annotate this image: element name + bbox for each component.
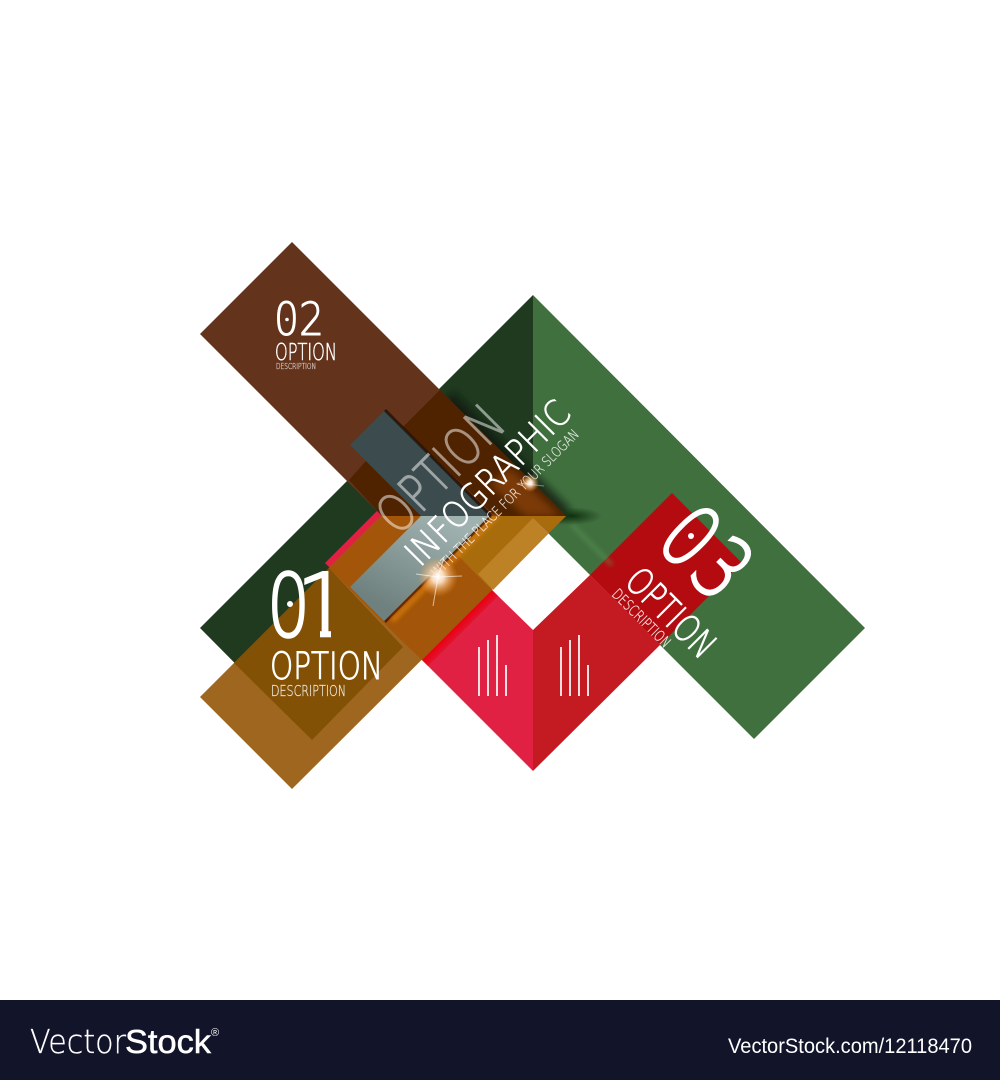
icon: small light flare: [518, 474, 544, 492]
panel: red chevron: [325, 493, 742, 771]
heading: infographic: INFOGRAPHIC: [397, 393, 579, 574]
icon: large light flare: [416, 557, 462, 606]
footer logo: Vector: [30, 1022, 126, 1061]
text block: option 02: 02: [274, 293, 324, 346]
text block: option 03: DESCRIPTION: [608, 585, 675, 652]
text block: option 01: OPTION: [270, 645, 383, 688]
text block: option 01: [272, 570, 379, 696]
text block: option 02: DESCRIPTION: [276, 362, 316, 371]
panel: green chevron: [200, 295, 865, 740]
text block: option 02: [274, 293, 337, 371]
slogan text: WITH THE PLACE FOR YOUR SLOGAN: [429, 427, 583, 581]
text block: option 03: [608, 486, 773, 667]
footer bar: [0, 1000, 1000, 1080]
text block: option 01: 0: [267, 555, 310, 657]
footer logo: ®: [211, 1027, 219, 1039]
footer image id: VectorStock.com/12118470: [728, 1035, 972, 1058]
panel: grey bar: [350, 410, 498, 622]
text block: option 03: 0: [639, 486, 741, 588]
panel: brown band: [200, 242, 566, 516]
icon: left red bar chart: [478, 635, 507, 696]
text block: option 03: OPTION: [617, 559, 725, 667]
shadow on green near the tip: [448, 398, 612, 565]
heading: center option: OPTION: [365, 393, 518, 546]
icon: right red bar chart: [560, 635, 589, 696]
text block: option 01: 1: [296, 555, 351, 657]
infographic canvas: [0, 242, 1000, 1080]
footer logo: [30, 1022, 219, 1061]
text block: option 01: DESCRIPTION: [271, 682, 346, 700]
panel: orange band: [200, 516, 566, 789]
text block: option 02: OPTION: [275, 340, 337, 366]
text block: option 03: 3: [670, 518, 773, 620]
footer logo: Stock: [125, 1023, 212, 1060]
